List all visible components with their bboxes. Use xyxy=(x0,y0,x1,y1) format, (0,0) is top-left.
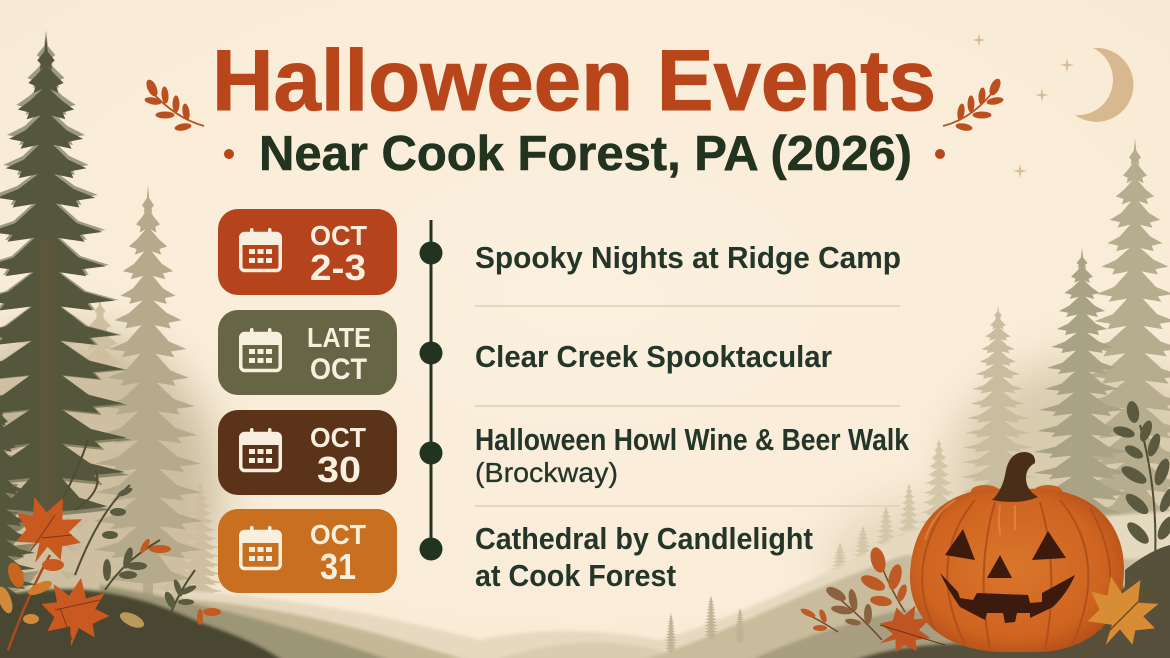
leaf: red leaf by pumpkin xyxy=(869,596,945,658)
decoration: crescent moon xyxy=(1075,48,1133,122)
foliage: right fern xyxy=(1112,400,1170,620)
event: Cathedral by Candlelight: at Cook Forest xyxy=(475,558,676,593)
event: Clear Creek: Clear Creek Spooktacular xyxy=(475,339,832,374)
tree: pale left fir xyxy=(93,185,203,595)
date badge: Late Oct: LATE xyxy=(307,322,371,353)
pumpkin xyxy=(910,452,1124,652)
small hill firs xyxy=(665,595,746,653)
pumpkin nose xyxy=(987,555,1012,578)
tree: centre right fir xyxy=(1031,248,1133,550)
icon: calendar xyxy=(240,328,280,370)
date badge: Late Oct xyxy=(218,310,397,395)
icon: calendar xyxy=(240,428,280,470)
event: Cathedral by Candlelight xyxy=(475,521,813,593)
icon: right sprig xyxy=(943,77,1004,132)
date badge: Oct 30: 30 xyxy=(317,449,361,490)
date badge: Oct 2-3: 2-3 xyxy=(310,247,366,288)
date badge: Oct 2-3 xyxy=(218,209,397,295)
timeline xyxy=(420,220,442,560)
pumpkin mouth xyxy=(940,573,1075,623)
tree: left foreground fir xyxy=(0,30,132,625)
date badge: Oct 30: OCT xyxy=(310,422,366,453)
date badge: Late Oct: OCT xyxy=(310,353,367,386)
leaf: upper maple xyxy=(1,483,95,577)
date badge: Oct 31 xyxy=(218,509,397,593)
decoration: subtitle dots xyxy=(224,149,945,159)
icon: left sprig xyxy=(144,78,204,132)
pumpkin stem xyxy=(992,452,1038,502)
pumpkin right eye xyxy=(1032,531,1066,560)
date badge: Oct 2-3: OCT xyxy=(310,220,367,251)
pumpkin left eye xyxy=(945,529,975,560)
icon: calendar xyxy=(240,228,280,270)
date badge: Oct 31: OCT xyxy=(310,519,366,550)
foliage: right sprigs xyxy=(799,546,909,640)
icon: calendar xyxy=(240,526,280,568)
leaf: orange oak leaf xyxy=(1072,562,1170,658)
distant trees left xyxy=(0,210,223,620)
event: Spooky Nights: Spooky Nights at Ridge Camp xyxy=(475,240,901,275)
event: Halloween Howl: (Brockway) xyxy=(475,457,618,488)
title: Halloween Events xyxy=(212,33,936,129)
forest haze xyxy=(0,330,1170,650)
hills xyxy=(0,510,1170,658)
distant trees right xyxy=(827,437,961,592)
foliage: left plants xyxy=(0,440,221,650)
event: Halloween Howl: Halloween Howl Wine & Beer Walk xyxy=(475,422,910,457)
event: Halloween Howl xyxy=(475,422,910,488)
date badge: Oct 30 xyxy=(218,410,397,495)
decoration: stars xyxy=(972,33,1074,178)
date badge: Oct 31: 31 xyxy=(320,546,356,587)
tree: pale right fir xyxy=(961,305,1035,515)
leaf: lower maple xyxy=(35,572,115,652)
event: Cathedral by Candlelight: Cathedral by Candlelight xyxy=(475,521,813,556)
subtitle: Near Cook Forest, PA (2026) xyxy=(259,127,912,181)
tree: far right fir xyxy=(1080,138,1170,540)
